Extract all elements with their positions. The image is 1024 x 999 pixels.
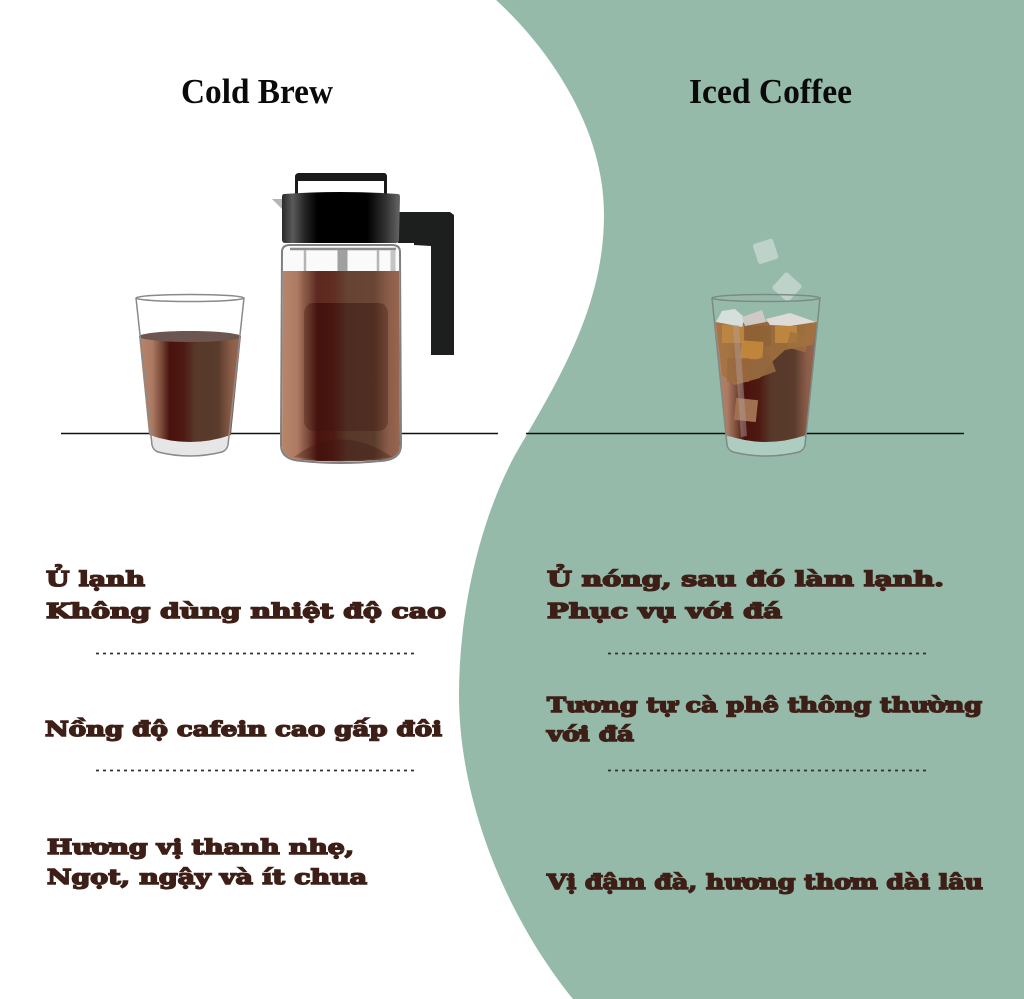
table line: right bbox=[526, 432, 964, 434]
jar upper lighter band bbox=[305, 271, 388, 303]
text: iced coffee caffeine bbox=[546, 693, 982, 746]
background: green wavy panel bbox=[459, 0, 1024, 999]
jar coffee bbox=[282, 271, 400, 462]
heading: Iced Coffee: Iced Coffee bbox=[689, 72, 852, 111]
divider left 1 bbox=[96, 652, 414, 654]
illustration: cold brew jar bbox=[272, 173, 454, 463]
jar handle bbox=[398, 212, 454, 355]
illustration: iced coffee glass bbox=[712, 238, 820, 456]
text: iced coffee process: Ủ nóng, sau đó làm lạnh. bbox=[547, 563, 944, 591]
text: cold brew flavor bbox=[47, 835, 367, 889]
text: cold brew flavor: Hương vị thanh nhẹ, bbox=[47, 835, 354, 859]
ice cubes bbox=[716, 309, 817, 422]
table line: left bbox=[61, 432, 498, 434]
falling ice cube top bbox=[752, 238, 779, 265]
jar top loop handle bbox=[295, 173, 387, 194]
divider right 1 bbox=[608, 652, 926, 654]
jar bottom shade bbox=[294, 440, 392, 460]
text: cold brew process: Ủ lạnh bbox=[46, 563, 145, 591]
text: iced coffee caffeine: Tương tự cà phê thông thường bbox=[547, 693, 982, 717]
jar strainer bbox=[290, 248, 396, 250]
text: iced coffee caffeine: với đá bbox=[546, 722, 634, 746]
text: cold brew flavor: Ngọt, ngậy và ít chua bbox=[47, 865, 367, 889]
text: cold brew caffeine: Nồng độ cafein cao gấp đôi bbox=[45, 717, 442, 741]
text: cold brew process bbox=[46, 563, 446, 623]
jar glass body bbox=[281, 245, 401, 463]
text: iced coffee process: Phục vụ với đá bbox=[547, 599, 782, 623]
text: cold brew process: Không dùng nhiệt độ cao bbox=[46, 599, 446, 623]
illustration: cold brew glass bbox=[136, 294, 244, 456]
jar spout bbox=[272, 199, 283, 210]
divider left 2 bbox=[96, 770, 414, 772]
divider right 2 bbox=[608, 770, 926, 772]
jar inner filter bbox=[304, 303, 388, 431]
straw bbox=[733, 325, 747, 437]
jar lid bbox=[282, 192, 400, 243]
heading: Cold Brew: Cold Brew bbox=[181, 72, 334, 111]
falling ice cube bottom bbox=[771, 271, 803, 303]
text: iced coffee flavor: Vị đậm đà, hương thơm dài lâu bbox=[546, 870, 983, 894]
text: iced coffee process bbox=[547, 563, 944, 623]
